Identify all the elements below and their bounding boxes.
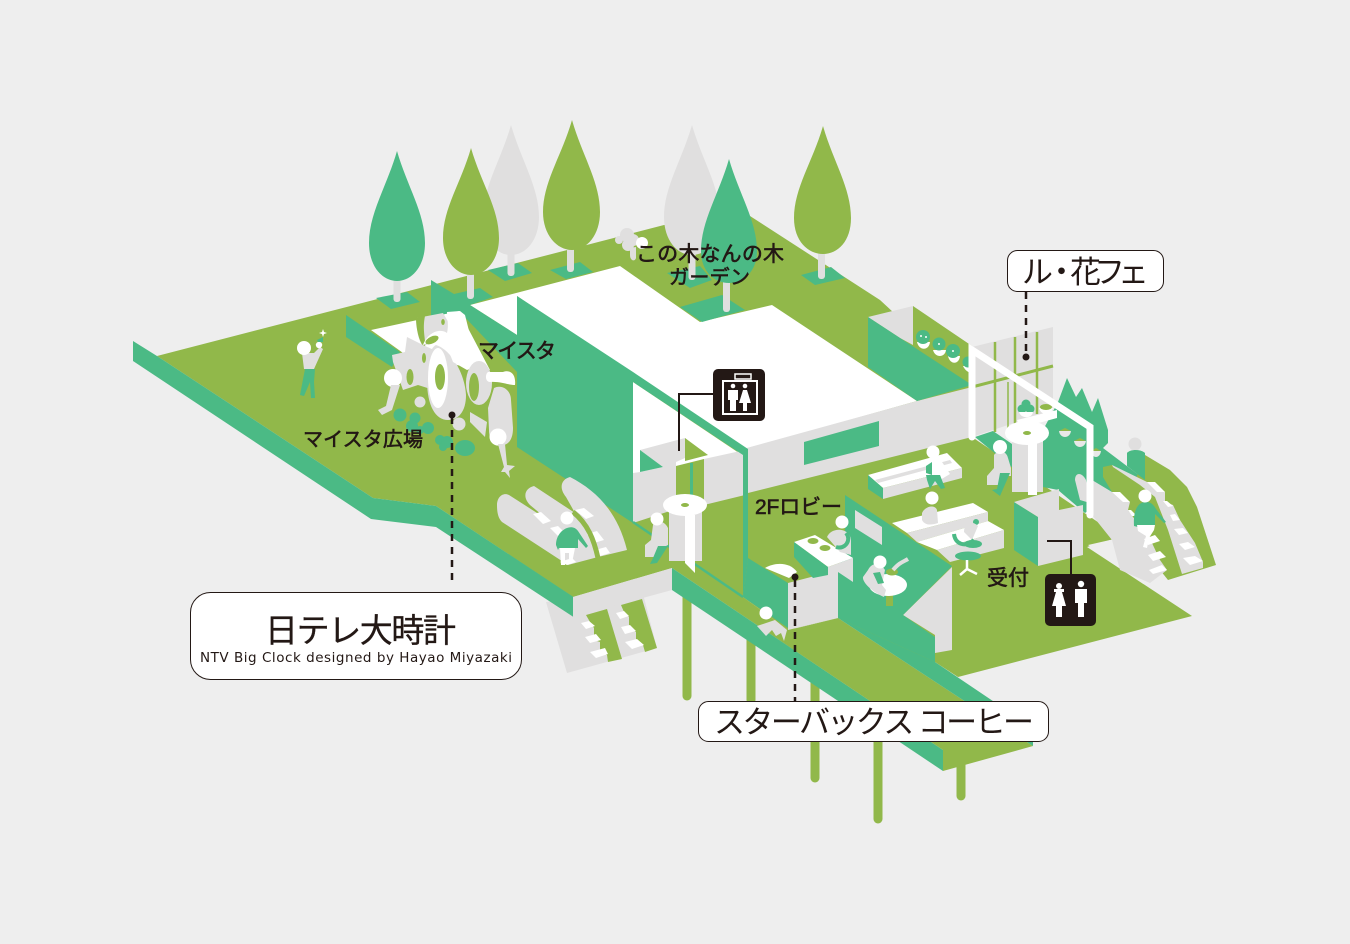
label: garden: この木なんの木 — [636, 243, 784, 266]
table with seated person — [863, 556, 908, 606]
teal bushes — [394, 408, 475, 456]
callout: NTV Big Clock: 日テレ大時計 — [265, 612, 456, 649]
teal diagonal partition — [838, 495, 952, 662]
back top band white wedge — [371, 311, 490, 370]
olive tree 2 — [443, 148, 499, 299]
right tree and teal courtyard — [975, 378, 1165, 513]
clock white pipe — [486, 371, 515, 385]
support columns — [687, 585, 961, 819]
olive between stairs — [1103, 465, 1182, 578]
callout: flower cafe: ル・花フェ — [1022, 255, 1149, 290]
left escalators — [497, 477, 627, 565]
person on right stairs — [1134, 490, 1166, 548]
tree bases — [376, 262, 845, 322]
person near column right — [987, 440, 1011, 496]
teal beam and column — [633, 372, 748, 597]
chair person — [954, 519, 982, 575]
leader line to clock — [448, 412, 456, 580]
main teal wall — [517, 296, 633, 523]
gray triangle partition end — [903, 567, 952, 653]
olive tree right — [794, 126, 851, 279]
callout: NTV Big Clock: NTV Big Clock designed by Hayao Miyazaki — [200, 650, 512, 666]
clock sculpture NTV Big Clock — [378, 311, 515, 478]
counter — [794, 535, 853, 582]
trees — [369, 120, 851, 312]
teal wedge left — [346, 315, 400, 367]
right stair gray — [1112, 465, 1203, 574]
label: 2F lobby: 2Fロビー — [755, 496, 842, 519]
white frame — [972, 350, 1090, 515]
label: maista plaza: マイスタ広場 — [303, 428, 423, 451]
person taking photo — [297, 329, 327, 398]
teal lip and strip — [672, 568, 1033, 771]
floor right: lobby — [743, 437, 1192, 677]
person at column left — [645, 494, 707, 573]
bench one — [868, 453, 962, 499]
thin teal rail — [633, 522, 743, 597]
callout: NTV Big Clock — [190, 592, 522, 680]
label: reception: 受付 — [987, 567, 1029, 590]
gray tree right — [664, 125, 720, 280]
white steps — [1112, 482, 1203, 574]
starbucks counter wall — [743, 558, 838, 630]
clock left leg — [384, 369, 402, 387]
roof white — [470, 266, 917, 450]
left stair gray — [1092, 480, 1167, 583]
label: maista: マイスタ — [478, 340, 556, 363]
clock main wheel — [427, 345, 466, 420]
white interior — [633, 382, 742, 490]
lower stair — [546, 590, 657, 673]
callout: Starbucks: スターバックス コーヒー — [714, 705, 1034, 740]
callout: flower cafe — [1008, 250, 1164, 292]
label: garden — [636, 243, 784, 289]
label: garden: ガーデン — [669, 266, 750, 289]
teal window — [804, 421, 879, 465]
plaza teal edge — [133, 341, 574, 617]
cafe tables with bowls — [1005, 400, 1101, 495]
clock upper gray blob — [417, 313, 450, 347]
teal tree right — [701, 159, 757, 312]
olive tree 3 — [543, 120, 600, 272]
plaza front face — [573, 568, 672, 617]
counter person — [827, 516, 851, 555]
crouching person — [757, 606, 787, 641]
bench person — [926, 446, 950, 489]
glass facade — [972, 327, 1057, 437]
bench two sitting person — [922, 492, 938, 525]
restroom leader line — [1047, 541, 1071, 574]
gray tree left — [483, 125, 539, 276]
gray building front — [633, 387, 972, 523]
person on escalator — [556, 512, 588, 565]
reception box — [1014, 489, 1083, 566]
floor left: olive plaza — [133, 216, 972, 652]
small figure near garden — [615, 228, 648, 260]
flower pots — [916, 330, 974, 373]
upper right box with planter wall — [868, 306, 975, 401]
teal tree left — [369, 151, 425, 302]
elevator leader line — [679, 394, 713, 451]
leader line to cafe — [1022, 292, 1030, 360]
gray person behind rail — [1127, 438, 1145, 480]
bench two — [892, 503, 1004, 562]
clock small wheel — [466, 361, 492, 405]
icon: elevator sign — [713, 369, 765, 421]
right olive lawn — [1120, 455, 1216, 580]
clock right leg — [488, 387, 513, 446]
leader line to starbucks — [792, 574, 798, 701]
back teal wall — [431, 280, 517, 372]
right stairs — [1075, 465, 1203, 583]
partition window — [855, 510, 882, 545]
clock left body — [392, 337, 445, 392]
clock white hood — [423, 311, 480, 370]
icon: restroom sign — [1045, 574, 1096, 626]
clock small parts — [414, 396, 426, 408]
